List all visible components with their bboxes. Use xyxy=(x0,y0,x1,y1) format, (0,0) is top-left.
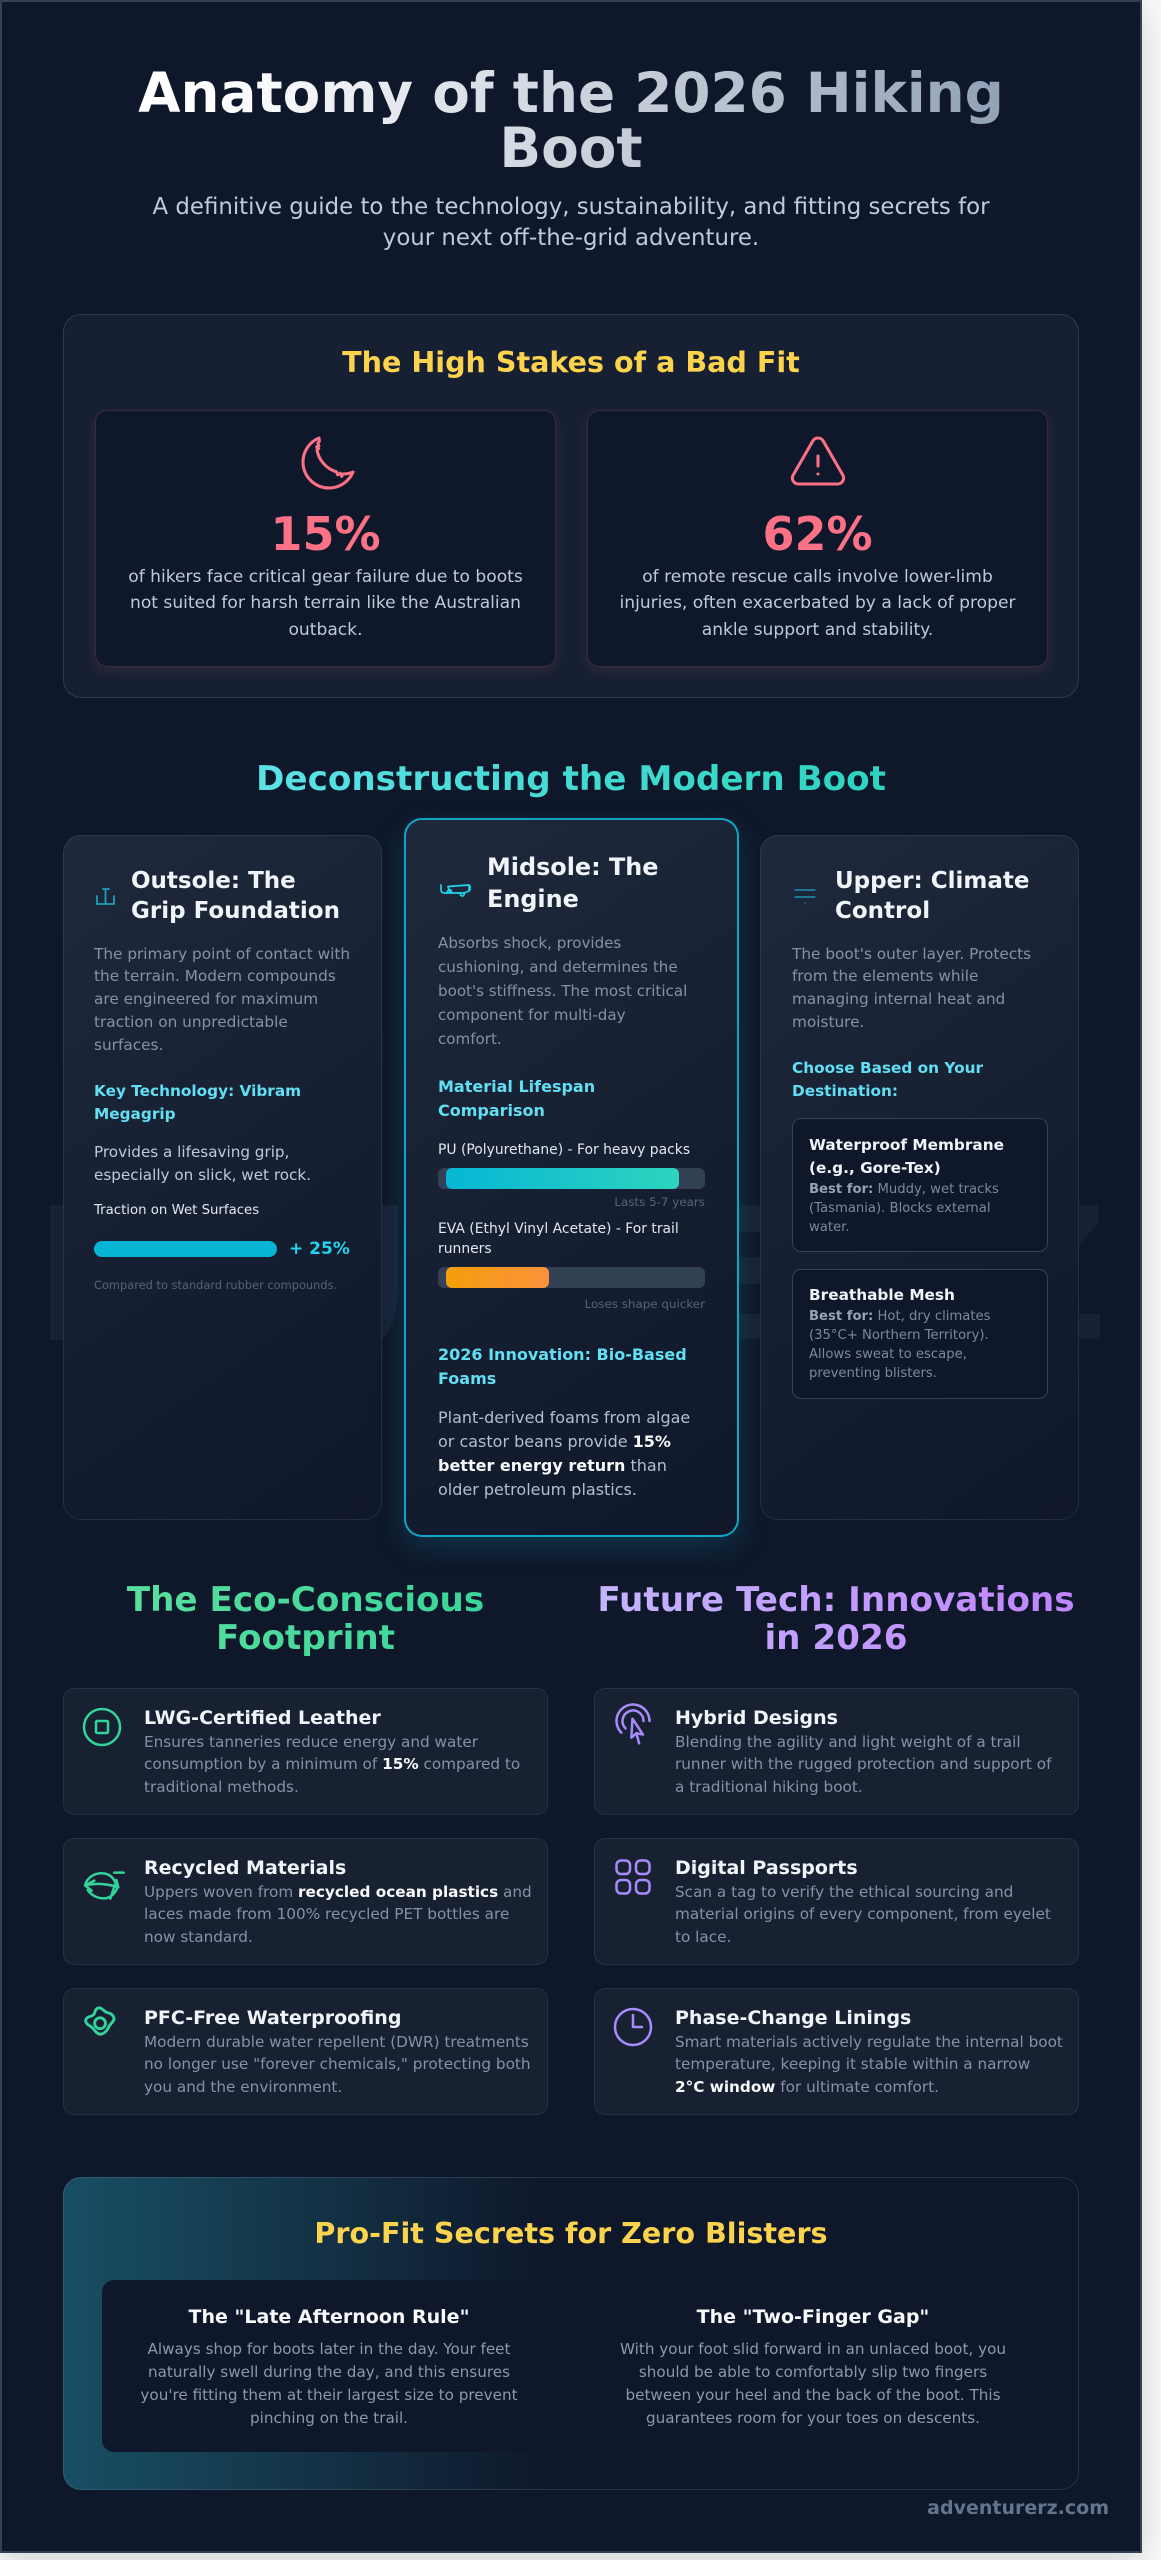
stat card: 62% xyxy=(587,410,1048,667)
description: cushioning, and determines the xyxy=(438,958,678,976)
stat description: ankle support and stability. xyxy=(702,620,933,640)
label: EVA: runners xyxy=(438,1241,492,1257)
description: moisture. xyxy=(792,1013,864,1031)
subheading: key technology xyxy=(94,1082,301,1122)
option text xyxy=(809,1308,991,1380)
panel: outsole card xyxy=(63,835,382,1520)
stat card: 15% xyxy=(95,410,556,667)
item: digital passports xyxy=(594,1838,1079,1965)
item text: Modern durable water repellent (DWR) treatments xyxy=(144,2033,529,2051)
description: comfort. xyxy=(438,1030,502,1048)
item text: Smart materials actively regulate the internal boot xyxy=(675,2033,1063,2051)
item text xyxy=(144,2033,531,2096)
heading: future tech: Future Tech: Innovations xyxy=(597,1580,1075,1620)
description: surfaces. xyxy=(94,1036,163,1054)
bar value: + 25% xyxy=(289,1238,350,1258)
icon: outsole anchor xyxy=(96,888,115,905)
tip text: Always shop for boots later in the day. Your feet xyxy=(148,2340,510,2358)
heading: deconstructing the modern boot: Deconstructing the Modern Boot xyxy=(256,758,886,798)
option text xyxy=(809,1182,999,1235)
option text: water. xyxy=(809,1220,850,1235)
stat description: not suited for harsh terrain like the Australian xyxy=(130,593,521,613)
tip title: The "Two-Finger Gap" xyxy=(697,2306,929,2328)
item title: Digital Passports xyxy=(675,1857,858,1879)
technology text: Provides a lifesaving grip, xyxy=(94,1143,289,1161)
card title: Outsole: The xyxy=(131,868,296,894)
description: from the elements while xyxy=(792,967,978,985)
subheading: key technology: Megagrip xyxy=(94,1104,176,1122)
title: Anatomy of the 2026 Hiking xyxy=(138,60,1004,124)
tip text: between your heel and the back of the boot. This xyxy=(625,2386,1000,2404)
description: boot's stiffness. The most critical xyxy=(438,982,687,1000)
card title: Upper: Climate xyxy=(835,868,1029,894)
panel: pro-fit secrets xyxy=(63,2177,1079,2490)
innovation text: Plant-derived foams from algae xyxy=(438,1408,690,1426)
option name: Waterproof Membrane xyxy=(809,1136,1004,1154)
description: are engineered for maximum xyxy=(94,990,318,1008)
figure: 62%: 62% xyxy=(762,507,873,561)
chart label: Traction on Wet Surfaces xyxy=(94,1203,259,1218)
subheading: choose: Destination: xyxy=(792,1082,898,1100)
option name xyxy=(809,1136,1004,1177)
description xyxy=(94,945,350,1054)
option text: (35°C+ Northern Territory). xyxy=(809,1328,989,1342)
item: LWG-certified leather xyxy=(63,1688,548,1815)
item text: a traditional hiking boot. xyxy=(675,1778,863,1796)
tip text xyxy=(140,2340,518,2426)
subheading: innovation: 2026 Innovation: Bio-Based xyxy=(438,1344,687,1364)
icon: clock xyxy=(614,2008,652,2046)
label: EVA: EVA (Ethyl Vinyl Acetate) - For trail xyxy=(438,1221,679,1237)
item text xyxy=(144,1883,532,1946)
subheading: material lifespan: Material Lifespan xyxy=(438,1077,595,1096)
card title: Grip Foundation xyxy=(131,898,340,924)
stat description: outback. xyxy=(288,620,363,640)
item text: temperature, keeping it stable within a narrow xyxy=(675,2055,1030,2073)
subheading: innovation: Foams xyxy=(438,1368,496,1388)
panel: midsole card xyxy=(404,818,739,1537)
tip text: you're fitting them at their largest size to prevent xyxy=(140,2386,518,2404)
technology text: especially on slick, wet rock. xyxy=(94,1166,311,1184)
stat description xyxy=(128,566,523,640)
item text: you and the environment. xyxy=(144,2078,342,2096)
technology text xyxy=(94,1143,311,1184)
tip text: With your foot slid forward in an unlaced boot, you xyxy=(620,2340,1006,2358)
title xyxy=(63,66,1079,176)
description: managing internal heat and xyxy=(792,990,1005,1008)
panel: upper card xyxy=(760,835,1079,1520)
card title: Control xyxy=(835,898,930,924)
innovation text: better energy return than xyxy=(438,1456,667,1474)
icon: stop circle xyxy=(82,1708,122,1746)
heading: future tech xyxy=(594,1580,1078,1656)
item title: Hybrid Designs xyxy=(675,1707,838,1729)
option text: preventing blisters. xyxy=(809,1366,937,1380)
heading: eco-conscious footprint xyxy=(63,1580,548,1656)
note: EVA: Loses shape quicker xyxy=(585,1297,705,1311)
innovation text xyxy=(438,1408,690,1498)
item text xyxy=(675,2033,1063,2096)
item title: PFC-Free Waterproofing xyxy=(144,2007,401,2029)
item text: no longer use "forever chemicals," protecting both xyxy=(144,2055,531,2073)
item text: consumption by a minimum of 15% compared to xyxy=(144,1755,520,1773)
item text: laces made from 100% recycled PET bottles are xyxy=(144,1905,509,1923)
stat description xyxy=(619,566,1016,640)
description: traction on unpredictable xyxy=(94,1013,288,1031)
description: The primary point of contact with xyxy=(94,945,350,963)
card title: Midsole: The xyxy=(487,853,658,881)
option: waterproof membrane xyxy=(792,1118,1048,1252)
icon: water repellent xyxy=(84,2006,116,2036)
subheading: choose: Choose Based on Your xyxy=(792,1058,983,1076)
option text: Best for: Muddy, wet tracks xyxy=(809,1182,999,1197)
icon: upper lines xyxy=(794,889,816,904)
note: PU: Lasts 5-7 years xyxy=(614,1195,705,1209)
item text xyxy=(675,1733,1052,1796)
label: EVA xyxy=(438,1221,679,1257)
label: PU: PU (Polyurethane) - For heavy packs xyxy=(438,1142,690,1158)
subheading: choose xyxy=(792,1058,983,1100)
item title: Phase-Change Linings xyxy=(675,2007,911,2029)
item title: LWG-Certified Leather xyxy=(144,1707,381,1729)
heading: deconstructing the modern boot xyxy=(63,760,1079,798)
subheading: material lifespan xyxy=(438,1077,595,1120)
chart note: Compared to standard rubber compounds. xyxy=(94,1278,337,1292)
item text: to lace. xyxy=(675,1928,731,1946)
traction chart xyxy=(94,1203,350,1292)
option text: (Tasmania). Blocks external xyxy=(809,1201,991,1216)
item title: Recycled Materials xyxy=(144,1857,346,1879)
heading: eco-conscious footprint: The Eco-Conscious xyxy=(127,1580,484,1620)
option text: Allows sweat to escape, xyxy=(809,1346,967,1362)
subtitle: A definitive guide to the technology, sustainability, and fitting secrets for xyxy=(153,194,989,220)
heading: future tech: in 2026 xyxy=(764,1618,908,1658)
panel: the high stakes of a bad fit xyxy=(63,314,1079,698)
tip title: The "Late Afternoon Rule" xyxy=(189,2306,469,2328)
innovation text: older petroleum plastics. xyxy=(438,1480,637,1498)
heading: high stakes: The High Stakes of a Bad Fit xyxy=(342,345,800,379)
icon: moon xyxy=(301,436,355,490)
tip text: guarantees room for your toes on descents. xyxy=(646,2408,980,2426)
item text: Blending the agility and light weight of a trail xyxy=(675,1733,1021,1751)
option text: Best for: Hot, dry climates xyxy=(809,1308,991,1324)
bar xyxy=(94,1241,277,1257)
item text: traditional methods. xyxy=(144,1778,299,1796)
card title xyxy=(487,853,658,913)
description: the terrain. Modern compounds xyxy=(94,967,336,985)
item text: runner with the rugged protection and support of xyxy=(675,1755,1051,1773)
item: hybrid designs xyxy=(594,1688,1079,1815)
item: phase-change linings xyxy=(594,1988,1079,2115)
bar: PU xyxy=(438,1168,705,1188)
item text: Ensures tanneries reduce energy and water xyxy=(144,1733,478,1751)
description: Absorbs shock, provides xyxy=(438,934,621,952)
subheading: key technology: Key Technology: Vibram xyxy=(94,1082,301,1100)
innovation text: or castor beans provide 15% xyxy=(438,1432,671,1450)
item: recycled materials xyxy=(63,1838,548,1965)
item text xyxy=(675,1883,1051,1946)
item text: now standard. xyxy=(144,1928,253,1946)
subtitle: your next off-the-grid adventure. xyxy=(383,225,759,251)
header xyxy=(138,60,1004,251)
subheading: material lifespan: Comparison xyxy=(438,1101,545,1120)
figure: 15%: 15% xyxy=(270,507,381,561)
lifespan comparison chart xyxy=(438,1142,705,1311)
stat description: of hikers face critical gear failure due to boots xyxy=(128,566,523,586)
option name: Breathable Mesh xyxy=(809,1286,955,1304)
icon: midsole xyxy=(440,884,471,897)
bar: EVA xyxy=(438,1267,705,1288)
icon: cursor ripple xyxy=(615,1703,651,1745)
option: breathable mesh xyxy=(792,1268,1048,1398)
item text xyxy=(144,1733,520,1796)
tip text: should be able to comfortably slip two fingers xyxy=(639,2362,987,2380)
description xyxy=(792,945,1031,1031)
card title xyxy=(131,868,340,924)
description: component for multi-day xyxy=(438,1006,626,1024)
subtitle xyxy=(152,194,990,251)
icon: grid squares xyxy=(615,1859,651,1895)
stat description: of remote rescue calls involve lower-limb xyxy=(642,566,993,586)
card title: Engine xyxy=(487,885,579,913)
card title xyxy=(835,868,1029,924)
icon: warning triangle xyxy=(790,436,846,486)
title: Boot xyxy=(499,116,643,180)
description: The boot's outer layer. Protects xyxy=(792,945,1031,963)
item text: Uppers woven from recycled ocean plastics and xyxy=(144,1883,532,1901)
item text: 2°C window for ultimate comfort. xyxy=(675,2078,939,2096)
heading: eco-conscious footprint: Footprint xyxy=(216,1618,395,1658)
item text: material origins of every component, from eyelet xyxy=(675,1905,1051,1923)
tip card: two-finger gap xyxy=(586,2280,1040,2452)
item: PFC-free waterproofing xyxy=(63,1988,548,2115)
heading: pro-fit secrets: Pro-Fit Secrets for Zero Blisters xyxy=(314,2216,828,2250)
tip text: pinching on the trail. xyxy=(250,2408,408,2426)
option name: (e.g., Gore-Tex) xyxy=(809,1159,941,1177)
description xyxy=(438,934,687,1048)
tip card: late afternoon rule xyxy=(102,2280,556,2452)
icon: recycled globe xyxy=(84,1871,125,1900)
tip text: naturally swell during the day, and this ensures xyxy=(148,2362,510,2380)
stat description: injuries, often exacerbated by a lack of proper xyxy=(619,593,1016,613)
subheading: innovation xyxy=(438,1344,687,1388)
item text: Scan a tag to verify the ethical sourcing and xyxy=(675,1883,1013,1901)
tip text xyxy=(586,2338,1040,2430)
footer brand: adventurerz.com xyxy=(927,2497,1109,2519)
